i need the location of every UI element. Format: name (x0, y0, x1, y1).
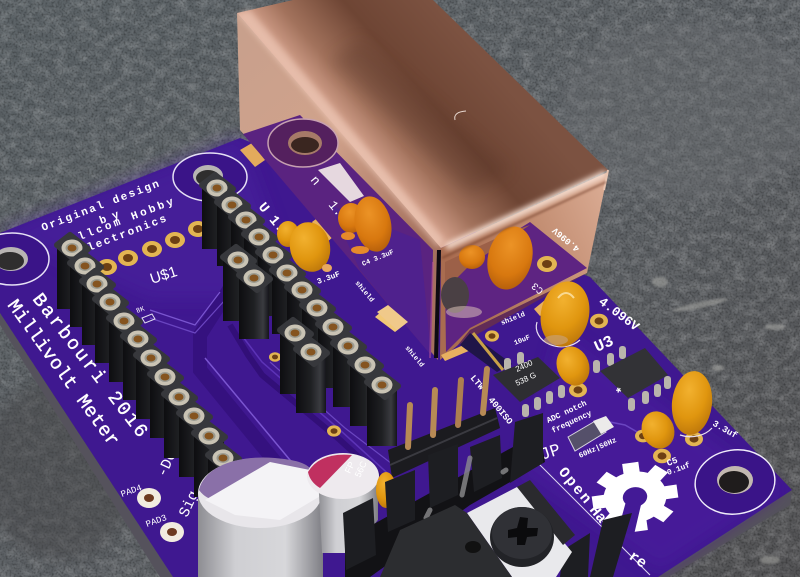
magenta topped capacitor: FP (343, 460, 357, 475)
silkscreen: pad labels: Sig (176, 488, 203, 520)
silkscreen: original design credit: Electronics (78, 214, 168, 258)
gold pad under can (441, 343, 471, 361)
silkscreen: open hardware: Open (554, 464, 594, 507)
via pads (269, 257, 608, 437)
gold pins (408, 369, 487, 447)
silkscreen: pad labels (120, 448, 203, 530)
silkscreen: capacitor values: 0.1uf (666, 461, 692, 478)
shield trace slot (460, 311, 580, 372)
shield trace slot: shield (500, 311, 527, 328)
regulator heat tab (467, 487, 572, 577)
header base (388, 408, 500, 478)
silkscreen: 3.3uf: 3.3uF (316, 270, 342, 287)
left reflective face (237, 13, 441, 360)
board reflected in front face: 4.096V (550, 224, 582, 253)
header labels: LTW (468, 374, 486, 393)
socket pair lower (280, 320, 327, 413)
header labels: 400ISO (486, 396, 515, 427)
voltage regulator and black connector (343, 413, 632, 577)
silkscreen: pad labels: -DC (154, 448, 181, 480)
open hardware gear logo (588, 457, 683, 540)
notch frequency jumper: JP (538, 441, 563, 466)
copper shield can (237, 0, 608, 369)
reflected board on left face: n (307, 173, 323, 189)
connector tabs (343, 413, 632, 577)
circuit board (0, 138, 792, 577)
reflected capacitors (338, 193, 396, 255)
scratch mark (455, 111, 466, 120)
capacitor 10uF (535, 277, 595, 351)
capacitor C5 (635, 406, 680, 463)
silkscreen: board title: Millivolt Meter (2, 296, 123, 451)
board surface (0, 138, 792, 577)
top face (237, 0, 608, 248)
mounting screw (490, 507, 554, 567)
reflected silkscreen text (353, 249, 425, 369)
notch frequency jumper: ADC notch (545, 399, 589, 426)
ADC chip (493, 352, 565, 417)
ADC chip: 2400 (514, 358, 534, 374)
silkscreen: capacitor values (613, 385, 739, 478)
shield trace slot: 10uF (513, 334, 532, 348)
small orange capacitor (376, 472, 396, 508)
silkscreen: version mark: U 1. (254, 200, 288, 236)
silkscreen: small resistor marker (135, 305, 155, 323)
seam between faces (436, 250, 439, 358)
board side outline line (537, 462, 650, 575)
ADC chip: 538 G (514, 370, 538, 388)
silkscreen: original design credit: by (98, 209, 121, 228)
reflected board on left face: 1.2 (325, 198, 351, 226)
magenta topped capacitor (307, 453, 379, 553)
reflected gold pads (377, 305, 408, 330)
notch frequency jumper (538, 399, 618, 466)
reflected board on left face (243, 115, 433, 355)
silkscreen: capacitor values: 3.3uf (710, 419, 739, 441)
notch frequency jumper: frequency (550, 409, 594, 436)
capacitor 3.3uF right (669, 369, 715, 446)
copper traces (150, 288, 660, 495)
board edge thickness (0, 313, 792, 577)
mounting hole left (0, 233, 49, 285)
large silver electrolytic capacitor (198, 457, 323, 577)
gold pad (240, 143, 265, 167)
socket header centre row (202, 175, 398, 446)
socket header left row (57, 235, 239, 519)
silkscreen: open hardware: Ha (585, 502, 610, 527)
reflected silkscreen text: shield (403, 345, 425, 369)
silkscreen: open hardware (554, 464, 650, 572)
silkscreen: original design credit: Original design (40, 179, 161, 235)
capacitors right group (535, 277, 715, 463)
silkscreen: voltage and U3 labels (592, 294, 642, 357)
magenta topped capacitor: 56C (353, 459, 369, 479)
silkscreen: original design credit (40, 179, 176, 258)
silkscreen: small resistor marker: 8K (135, 305, 147, 316)
male pin header (388, 369, 515, 478)
reflected silkscreen text: shield (353, 280, 375, 304)
capacitor C1 pair (277, 218, 335, 276)
silkscreen: capacitor values: * (613, 385, 627, 402)
silkscreen: open hardware: re (625, 548, 650, 572)
U3 reference chip (593, 346, 671, 411)
bright bend along front edge (446, 173, 606, 247)
input pads (137, 488, 184, 542)
notch frequency jumper: 60Hz|50Hz (578, 437, 618, 461)
capacitor 0.1uF top (551, 342, 595, 397)
through-hole pad row (97, 221, 208, 275)
silkscreen: capacitor values: C5 (666, 456, 679, 469)
silkscreen: voltage and U3 labels: U3 (592, 332, 617, 357)
header labels (468, 374, 515, 427)
gold pad shield (375, 306, 408, 332)
silkscreen: board title: Barbouri 2016 (27, 289, 152, 442)
front face (440, 172, 608, 360)
board reflected in front face (441, 222, 587, 352)
silkscreen: pad labels: PAD4 (120, 483, 143, 500)
gold pad (312, 216, 334, 243)
connector spine (345, 432, 545, 577)
board reflected in front face: C3 (530, 279, 547, 295)
mounting hole bottom right (691, 445, 779, 519)
connector pins (426, 458, 506, 518)
silkscreen: original design credit: Sullcom Hobby (59, 196, 176, 251)
reflected silkscreen text: C4 3.3uF (361, 249, 395, 269)
silkscreen: voltage and U3 labels: 4.096V (596, 294, 642, 334)
gold pad (534, 300, 553, 316)
regulator body (380, 505, 512, 577)
silkscreen: U$1: U$1 (148, 263, 179, 288)
mounting hole top (173, 153, 247, 201)
socket pair upper (223, 247, 270, 339)
silkscreen: pad labels: PAD3 (145, 513, 168, 530)
